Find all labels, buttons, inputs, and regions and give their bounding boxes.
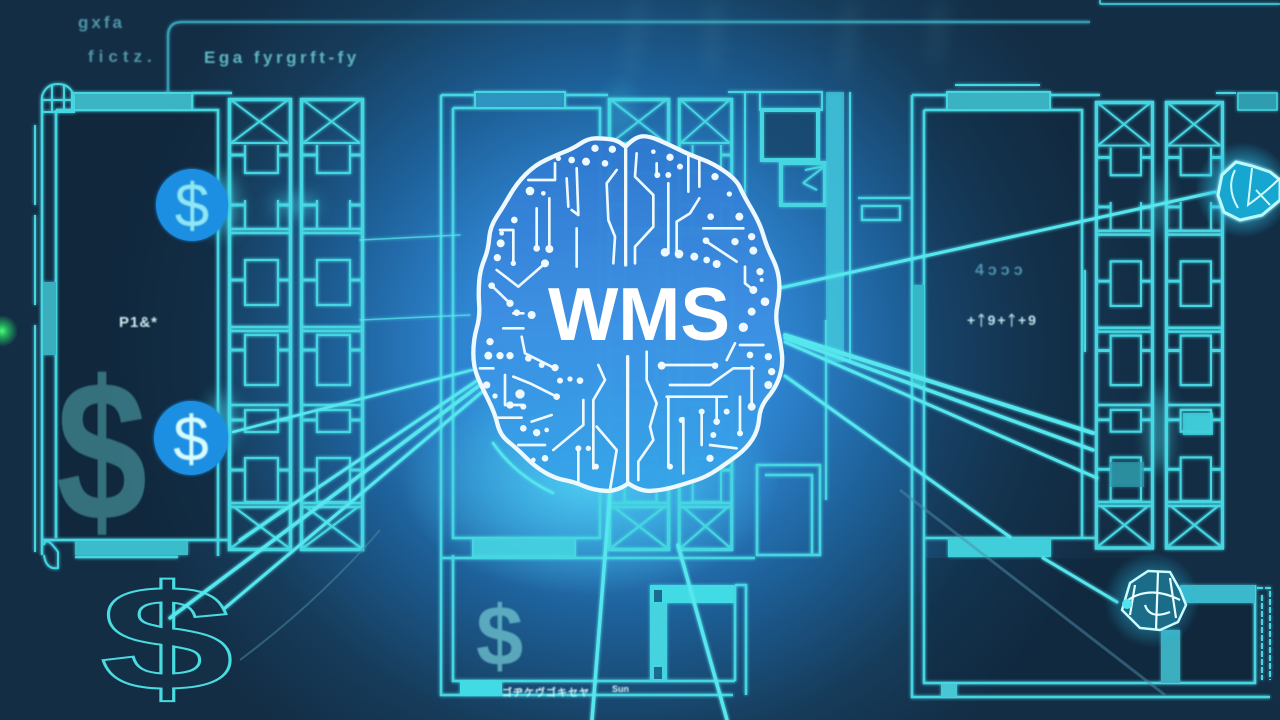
centre racks (609, 100, 669, 550)
blueprint labels: small annotation text: 4ↄↄↄ (975, 262, 1027, 279)
blueprint labels: small annotation text: Sun (612, 684, 629, 694)
blueprint labels: small annotation text: P1&* (119, 314, 158, 331)
icon: dollar coin lower left (154, 401, 228, 475)
blueprint labels: small annotation text: ゴヂケヴゴキセヤ (502, 686, 590, 699)
outlined dollar sign, bottom left: $ (100, 555, 233, 720)
blueprint labels: small annotation text: gxfa (78, 13, 125, 32)
blueprint labels: small annotation text: +ᛏ9+ᛏ+9 (967, 312, 1038, 328)
rack light blooms (208, 86, 1168, 472)
left racks (230, 100, 290, 550)
title: WMS: WMS (548, 272, 730, 356)
icon: glowing orb upper right (1195, 142, 1280, 238)
connection lines from brain (170, 192, 1215, 720)
left room (35, 84, 232, 568)
icon: dollar coin upper left (156, 169, 228, 241)
top right corner frame (1100, 0, 1280, 4)
top cable run (168, 22, 1090, 92)
icon: dollar coin upper left: $ (175, 172, 209, 241)
upper-right centre module (728, 92, 912, 555)
blueprint labels: small annotation text: fictz. (88, 47, 157, 66)
icon: green glow, left edge (0, 315, 18, 347)
blueprint labels: small annotation text (78, 13, 1038, 699)
right room (912, 85, 1277, 697)
brain circuit graphic (473, 136, 782, 491)
right bottom store room (941, 585, 1270, 697)
faint large dollar sign, left room: $ (56, 338, 147, 563)
icon: glowing mini brain lower right (1104, 552, 1200, 648)
faint diagonals (240, 490, 1165, 695)
faint dollar sign, centre store room: $ (476, 589, 523, 684)
blueprint labels: small annotation text: Ega fyrgrft-fy (204, 48, 360, 67)
room shading: dark blueprint interiors (56, 110, 1252, 683)
icon: dollar coin lower left: $ (173, 403, 209, 475)
small centre store room (650, 585, 746, 695)
right racks (1096, 103, 1152, 548)
brain with WMS title (473, 136, 782, 491)
centre room (441, 92, 755, 695)
